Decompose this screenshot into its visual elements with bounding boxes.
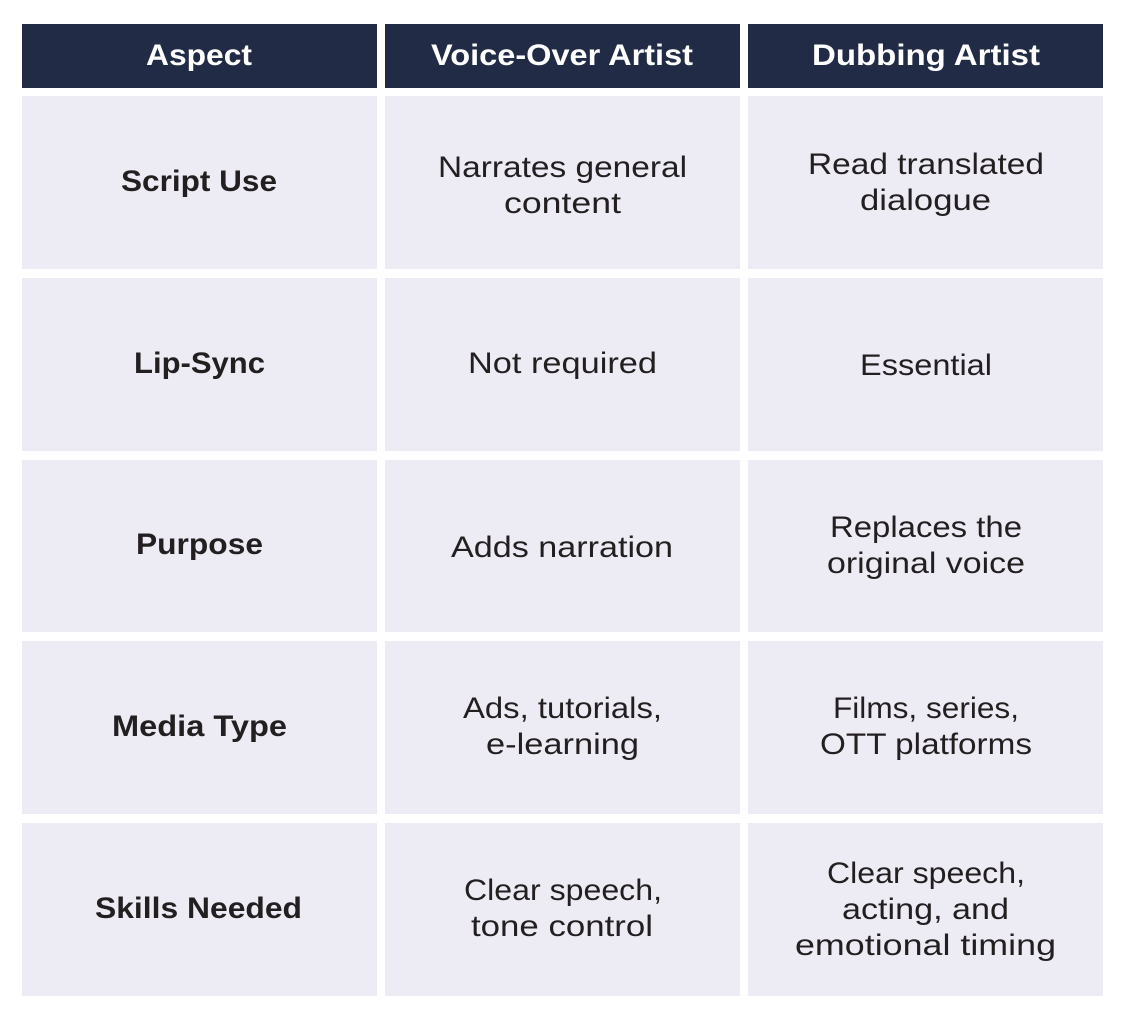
row: Lip-Sync xyxy=(22,278,1103,451)
voice-over: media type: e-learning xyxy=(486,728,639,761)
header: Aspect xyxy=(22,24,377,88)
row: Script Use xyxy=(22,96,1103,269)
header row xyxy=(22,24,1103,88)
dubbing: media type: OTT platforms xyxy=(820,728,1032,761)
header: Dubbing Artist xyxy=(748,24,1103,88)
dubbing: lip-sync xyxy=(748,278,1103,451)
dubbing: script use: dialogue xyxy=(860,184,991,217)
voice-over: skills needed xyxy=(385,823,740,996)
dubbing: script use xyxy=(748,96,1103,269)
voice-over: lip-sync: Not required xyxy=(468,347,657,380)
row: Skills Needed xyxy=(22,823,1103,996)
dubbing: skills needed: emotional timing xyxy=(795,929,1056,962)
voice-over: skills needed: Clear speech, xyxy=(464,874,662,907)
dubbing: skills needed xyxy=(748,823,1103,996)
dubbing: skills needed: Clear speech, xyxy=(827,857,1025,890)
voice-over: script use: Narrates general xyxy=(438,151,687,184)
dubbing: purpose: Replaces the xyxy=(830,511,1022,544)
dubbing: media type: Films, series, xyxy=(833,692,1019,725)
label: Purpose xyxy=(22,460,377,632)
voice-over: media type: Ads, tutorials, xyxy=(463,692,662,725)
label: Script Use: Script Use xyxy=(121,165,277,198)
label: Lip-Sync: Lip-Sync xyxy=(134,347,265,380)
header: Dubbing Artist: Dubbing Artist xyxy=(812,39,1040,72)
header: Aspect: Aspect xyxy=(146,39,252,72)
label: Media Type xyxy=(22,641,377,814)
voice-over: lip-sync xyxy=(385,278,740,451)
voice-over: script use xyxy=(385,96,740,269)
label: Skills Needed: Skills Needed xyxy=(95,892,302,925)
label: Purpose: Purpose xyxy=(136,528,263,561)
voice-over: purpose: Adds narration xyxy=(451,531,673,564)
dubbing: script use: Read translated xyxy=(808,148,1044,181)
voice-over: skills needed: tone control xyxy=(471,910,653,943)
dubbing: purpose: original voice xyxy=(827,547,1025,580)
header: Voice-Over Artist: Voice-Over Artist xyxy=(431,39,693,72)
dubbing: media type xyxy=(748,641,1103,814)
label: Skills Needed xyxy=(22,823,377,996)
voice-over: purpose xyxy=(385,460,740,632)
label: Lip-Sync xyxy=(22,278,377,451)
header: Voice-Over Artist xyxy=(385,24,740,88)
label: Script Use xyxy=(22,96,377,269)
voice-over: media type xyxy=(385,641,740,814)
dubbing: skills needed: acting, and xyxy=(842,893,1009,926)
row: Media Type xyxy=(22,641,1103,814)
row: Purpose xyxy=(22,460,1103,632)
dubbing: lip-sync: Essential xyxy=(860,349,992,382)
voice-over: script use: content xyxy=(504,187,622,220)
label: Media Type: Media Type xyxy=(112,710,287,743)
dubbing: purpose xyxy=(748,460,1103,632)
